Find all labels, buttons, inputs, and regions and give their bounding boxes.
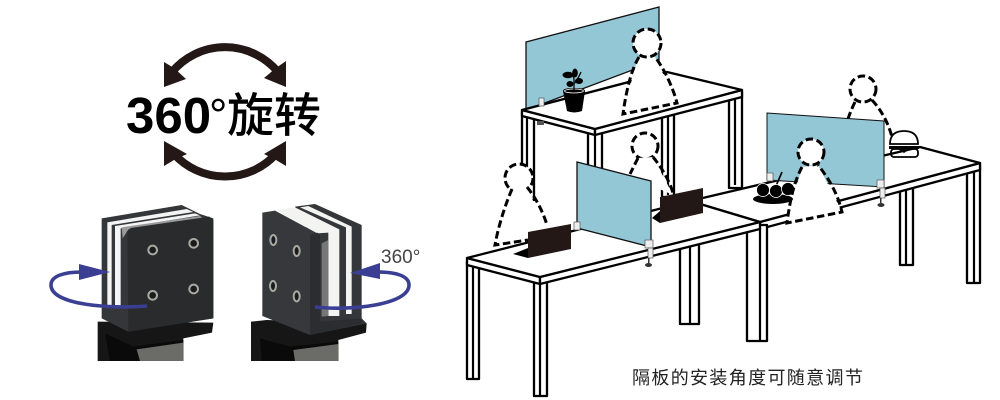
lower desk [467, 201, 767, 396]
icon: fruit bowl [753, 172, 794, 204]
person: upper desk [623, 29, 677, 114]
person: front right [787, 139, 842, 223]
arrow: right rotation [315, 263, 409, 308]
laptop: middle [652, 188, 703, 223]
right desk panel [767, 113, 884, 187]
upper desk [522, 72, 742, 200]
clamp: right desk panel [767, 173, 885, 207]
laptop: left [513, 224, 571, 258]
right desk [690, 147, 980, 283]
heading: 360° rotation: 360 [126, 87, 211, 144]
person: behind lower desk middle [630, 133, 673, 195]
arrow: left rotation [51, 264, 147, 307]
lower desk panel [577, 162, 651, 247]
upper desk panel [526, 7, 659, 110]
icon: hamburger [889, 131, 919, 157]
clamp: lower desk panel [574, 222, 653, 267]
photo: left bracket [98, 205, 213, 361]
photo: right bracket [251, 204, 367, 361]
rotation arrows icon [164, 47, 286, 177]
icon: potted plant [562, 68, 585, 112]
person: left [494, 164, 550, 246]
person: left dashed outline [495, 187, 547, 245]
caption: 隔板的安装角度可随意调节 [632, 368, 864, 388]
label: 360 degrees: 360° [381, 247, 420, 268]
heading: 360° rotation: 旋转 [227, 89, 321, 142]
person: behind right desk [848, 76, 892, 137]
heading: 360° rotation: ° [209, 89, 227, 141]
